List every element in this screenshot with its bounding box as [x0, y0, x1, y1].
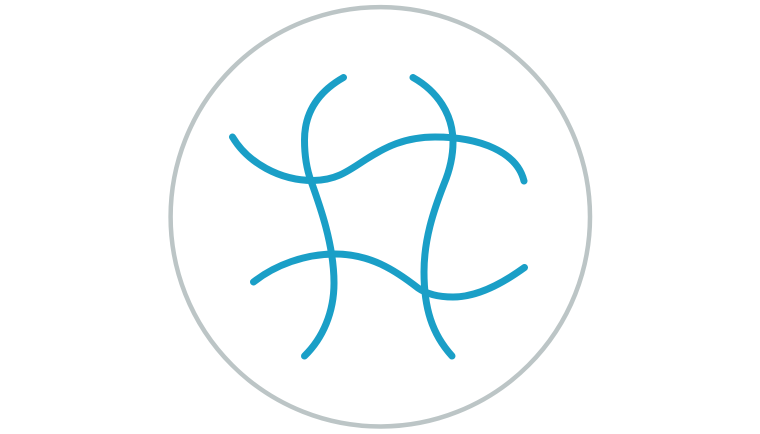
- curve: right vertical: [413, 78, 453, 356]
- curve: bottom horizontal: [254, 254, 524, 297]
- circle outline: [171, 7, 590, 426]
- curve: top horizontal: [232, 137, 524, 181]
- woven curves: [232, 78, 524, 356]
- curve: left vertical: [304, 78, 344, 356]
